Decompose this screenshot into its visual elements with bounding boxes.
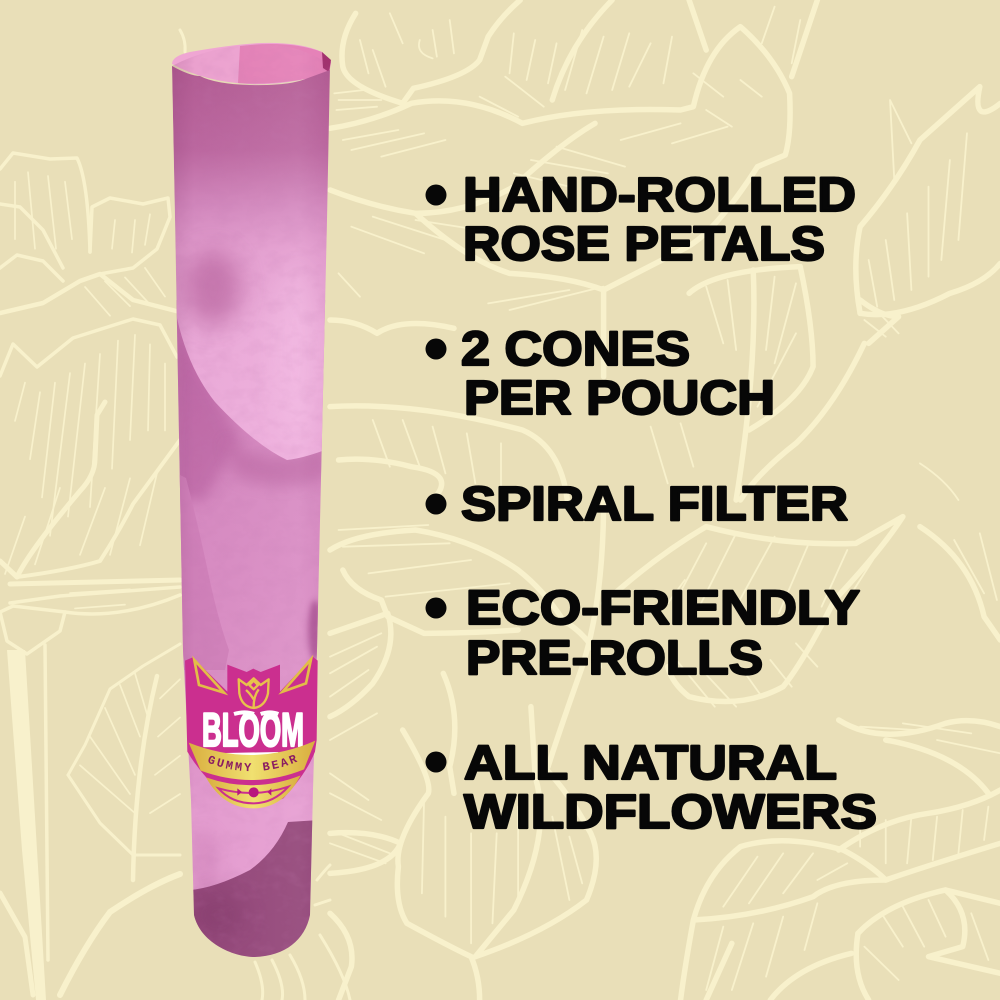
feature: 2 cones per pouch: PER POUCH xyxy=(464,372,775,425)
fold band xyxy=(180,475,229,670)
feature: eco-friendly pre-rolls xyxy=(426,582,860,685)
feature: eco-friendly pre-rolls: ECO-FRIENDLY xyxy=(466,582,860,635)
label chevrons xyxy=(194,659,311,693)
feature: hand-rolled rose petals: HAND-ROLLED xyxy=(463,169,856,222)
gold medallion xyxy=(206,775,301,808)
gold ribbon xyxy=(189,741,315,780)
lower petal section xyxy=(170,300,335,900)
feature: eco-friendly pre-rolls: PRE-ROLLS xyxy=(466,632,763,685)
upper petal xyxy=(172,66,330,460)
feature: all natural wildflowers: WILDFLOWERS xyxy=(464,786,877,839)
feature: hand-rolled rose petals: ROSE PETALS xyxy=(463,218,825,271)
flavor name: GUMMY BEAR xyxy=(208,755,298,772)
feature: spiral filter: SPIRAL FILTER xyxy=(461,478,848,531)
bullet list: features xyxy=(426,169,877,839)
left stem xyxy=(7,650,46,1000)
feature: all natural wildflowers xyxy=(426,737,877,839)
dark base petal xyxy=(193,820,312,957)
icon: tulip xyxy=(239,678,269,708)
logo flourishes xyxy=(225,712,278,755)
cone body xyxy=(170,40,335,970)
candy mark xyxy=(237,787,271,797)
product: rolled rose petal cone xyxy=(172,42,331,957)
feature: all natural wildflowers: ALL NATURAL xyxy=(464,737,837,790)
feature: 2 cones per pouch xyxy=(426,323,775,425)
feature: 2 cones per pouch: 2 CONES xyxy=(461,323,690,376)
cone rim opening xyxy=(172,43,331,84)
brand name: BLOOM xyxy=(202,704,304,757)
label band xyxy=(185,654,318,808)
feature: hand-rolled rose petals xyxy=(426,169,856,271)
